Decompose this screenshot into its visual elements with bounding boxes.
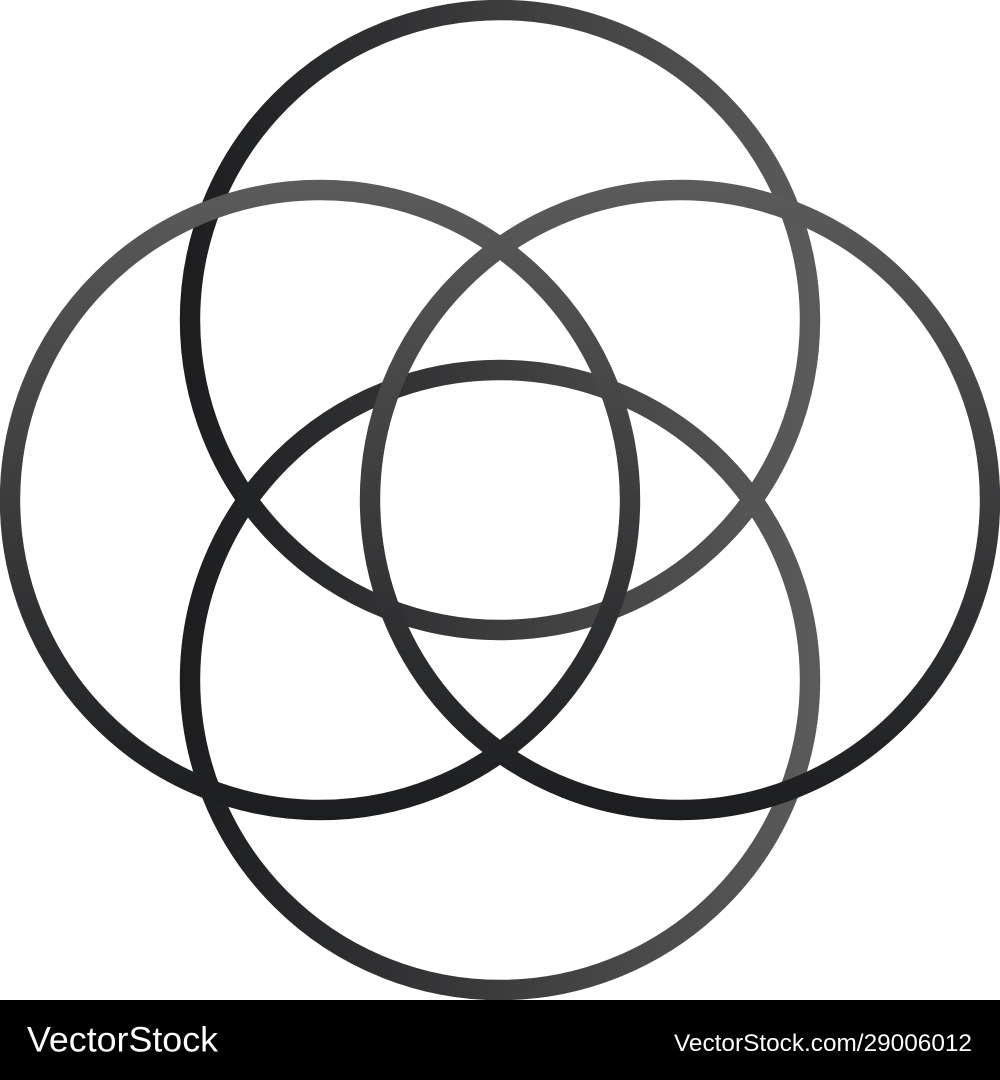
- circle: top: [190, 10, 810, 630]
- circle: left: [10, 190, 630, 810]
- footer image url: VectorStock.com/29006012: [674, 1030, 972, 1057]
- circle: right: [370, 190, 990, 810]
- footer brand name: VectorStock: [27, 1020, 219, 1060]
- footer bar: [0, 1000, 1000, 1080]
- circle: bottom: [190, 370, 810, 990]
